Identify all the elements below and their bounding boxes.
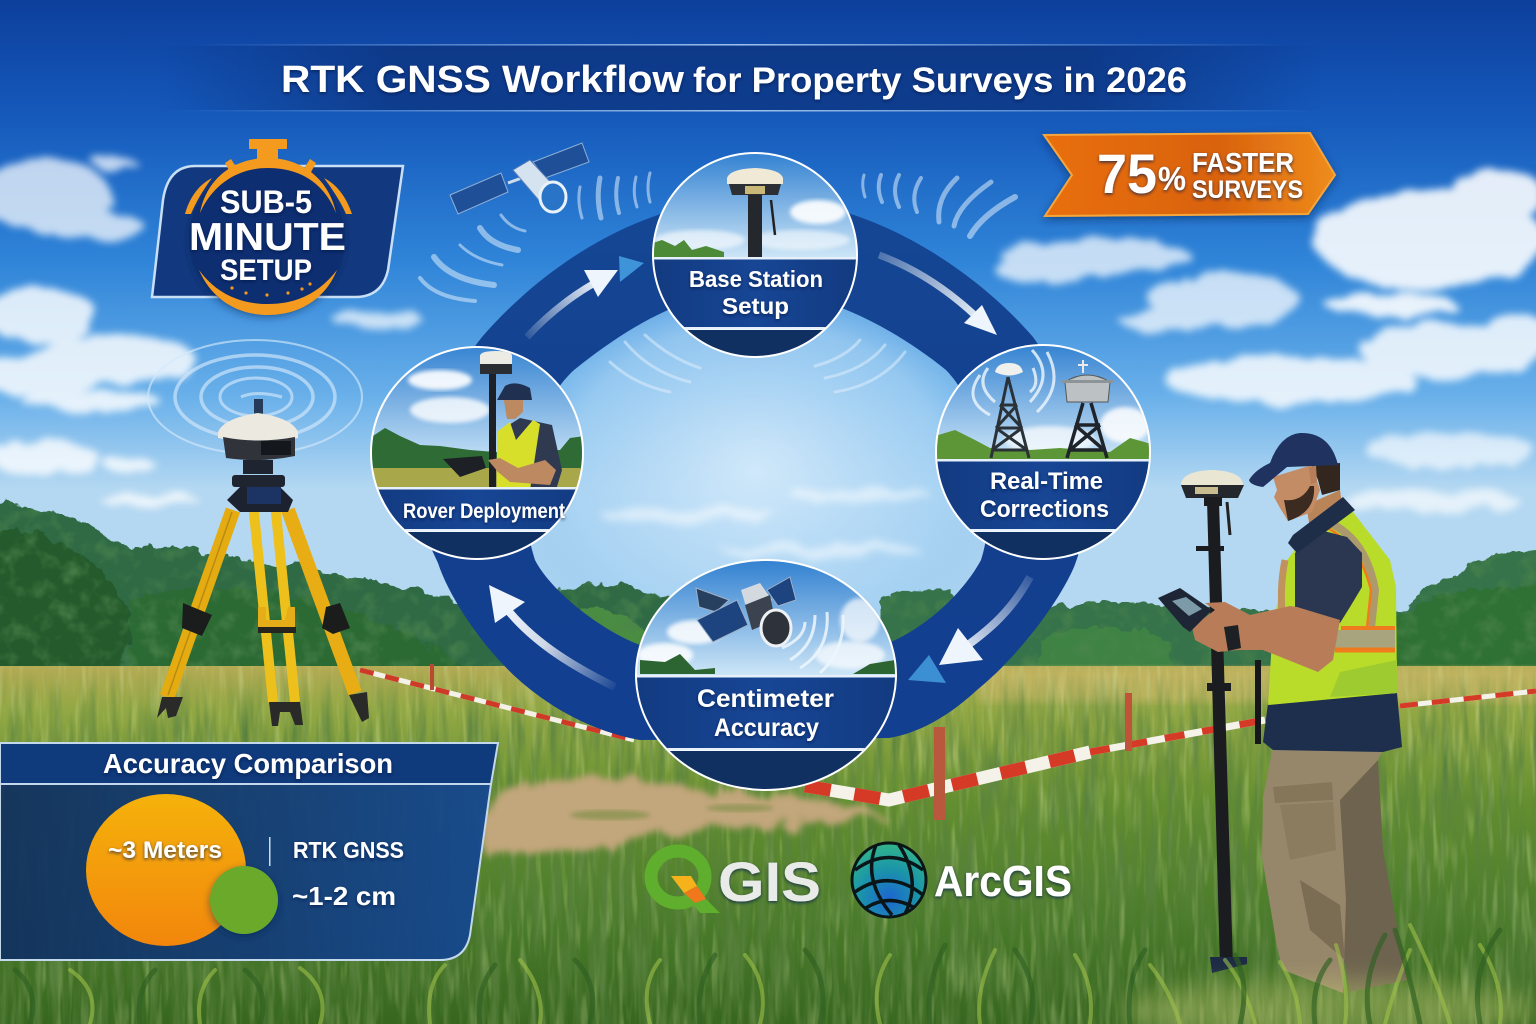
label (689, 266, 823, 319)
central sky glow (466, 245, 1046, 695)
pants (1262, 748, 1407, 993)
callout text: MINUTE (189, 216, 346, 259)
chart: accuracy circles (86, 794, 278, 946)
label: Setup (722, 293, 789, 319)
meadow ground (0, 666, 1536, 1024)
workflow ring (423, 198, 1086, 740)
label (697, 685, 834, 742)
title text: for Property Surveys in 2026 (693, 61, 1187, 100)
label: Real-Time (990, 468, 1103, 495)
collar (1288, 497, 1355, 553)
callout text (189, 184, 346, 287)
panel: centimeter accuracy (630, 558, 900, 796)
logo: QGIS: GIS (718, 850, 821, 913)
arrow: accuracy to rover (489, 585, 615, 687)
icon: towers (973, 350, 1113, 458)
icon: stopwatch (185, 139, 352, 315)
icon: satellite top (450, 143, 589, 214)
chart: accuracy circles: ~3 Meters (108, 837, 222, 864)
signal waves (420, 173, 1015, 392)
heading: Accuracy Comparison (103, 748, 393, 779)
icon: radio signal rings (148, 340, 362, 454)
callout: 75% faster surveys (1044, 133, 1335, 216)
panel: base station setup (650, 150, 860, 360)
faint central clouds (600, 488, 930, 556)
callout: 75% faster surveys: % (1158, 160, 1186, 197)
arrow: base to corrections (879, 255, 997, 335)
callout: 75% faster surveys: FASTER (1192, 147, 1294, 178)
shirt (1295, 530, 1362, 623)
dirt patch (480, 778, 885, 854)
icon: rover surveyor (443, 351, 562, 490)
title text: RTK GNSS Workflow (281, 59, 684, 101)
surveyor with rover pole (1158, 433, 1407, 993)
clouds (0, 156, 1536, 512)
RTK label: RTK GNSS (293, 837, 404, 863)
label: Base Station (689, 266, 823, 292)
label: Centimeter (697, 685, 834, 713)
label (980, 468, 1109, 523)
callout: 75% faster surveys: 75 (1097, 142, 1157, 205)
strap (1255, 660, 1261, 744)
hi-vis vest (1268, 512, 1397, 705)
label: Rover Deployment (403, 500, 565, 523)
head (1249, 433, 1340, 521)
title text (281, 59, 1187, 101)
callout: 75% faster surveys: SURVEYS (1192, 176, 1303, 204)
tripod legs (167, 503, 355, 702)
neck (1306, 490, 1342, 528)
distant tree line (0, 503, 1536, 690)
RTK value: ~1-2 cm (292, 881, 396, 911)
callout text: SUB-5 (220, 184, 312, 220)
label: Corrections (980, 496, 1109, 523)
arm and hand (1192, 602, 1340, 672)
label: Accuracy (714, 714, 819, 742)
lower jacket (1263, 693, 1402, 752)
panel: accuracy comparison (0, 743, 498, 960)
callout text: SETUP (220, 254, 312, 287)
cap (1249, 433, 1338, 487)
arrow: rover to base (527, 256, 644, 337)
title band (160, 44, 1320, 112)
icon: satellite (696, 577, 843, 673)
panel: rover deployment (370, 340, 585, 572)
boundary tape and stakes (360, 664, 1536, 820)
logo: ArcGIS (852, 843, 1072, 917)
tablet (1158, 588, 1212, 632)
logo: QGIS (651, 850, 821, 913)
base station tripod (148, 340, 369, 726)
foreground grass blades (15, 925, 1536, 1024)
rover pole (1181, 470, 1247, 973)
callout: sub-5 minute setup (152, 139, 403, 315)
logo: ArcGIS: ArcGIS (934, 857, 1072, 906)
icon: base antenna (727, 168, 783, 260)
arrow: corrections to accuracy (908, 577, 1030, 683)
sky background (0, 0, 1536, 720)
panel: real-time corrections (935, 340, 1155, 572)
